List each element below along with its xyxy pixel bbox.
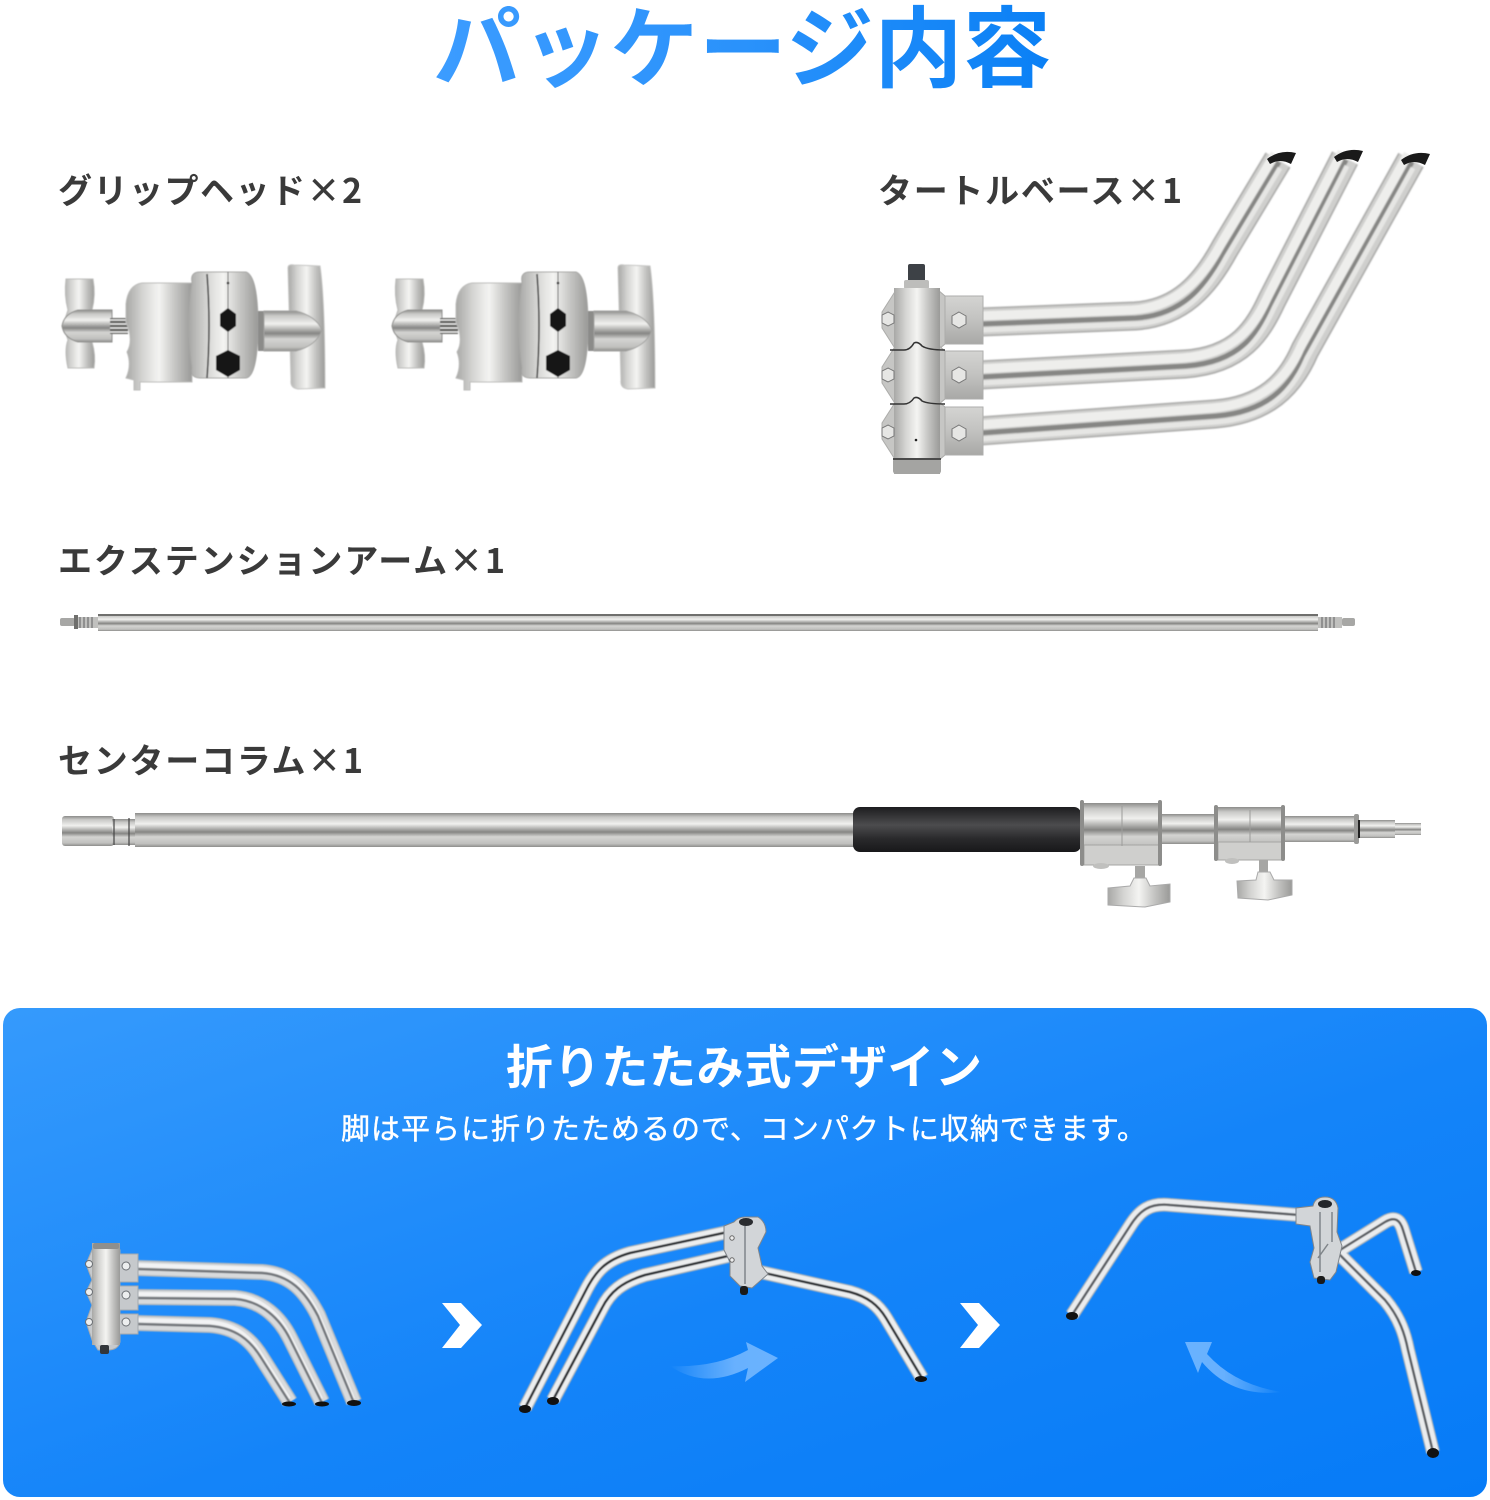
label: center column: センターコラム×1 — [58, 734, 363, 783]
label: extension arm: エクステンションアーム×1 — [58, 534, 505, 583]
panel subtitle: 脚は平らに折りたためるので、コンパクトに収納できます。 — [341, 1106, 1146, 1148]
panel: folding design — [3, 1008, 1487, 1497]
icon: center column — [62, 800, 1421, 907]
arrow: curved rotation left — [1185, 1342, 1282, 1393]
label: grip heads: グリップヘッド×2 — [58, 164, 362, 213]
arrow: curved rotation right — [670, 1342, 778, 1382]
lower clamp 1 — [1080, 800, 1170, 907]
panel heading: 折りたたみ式デザイン — [506, 1029, 982, 1098]
icon: half-open legs — [519, 1217, 927, 1413]
arrow: chevron 1 — [442, 1303, 482, 1348]
icon: folded legs — [86, 1243, 361, 1406]
icon: extension arm — [60, 614, 1355, 631]
label: turtle base: タートルベース×1 — [878, 164, 1182, 213]
icon: fully open legs — [1066, 1197, 1439, 1458]
lower clamp 2 — [1214, 805, 1292, 900]
icon: turtle base — [882, 150, 1430, 474]
icon: grip head pair — [62, 265, 655, 390]
arrow: chevron 2 — [960, 1303, 1000, 1348]
